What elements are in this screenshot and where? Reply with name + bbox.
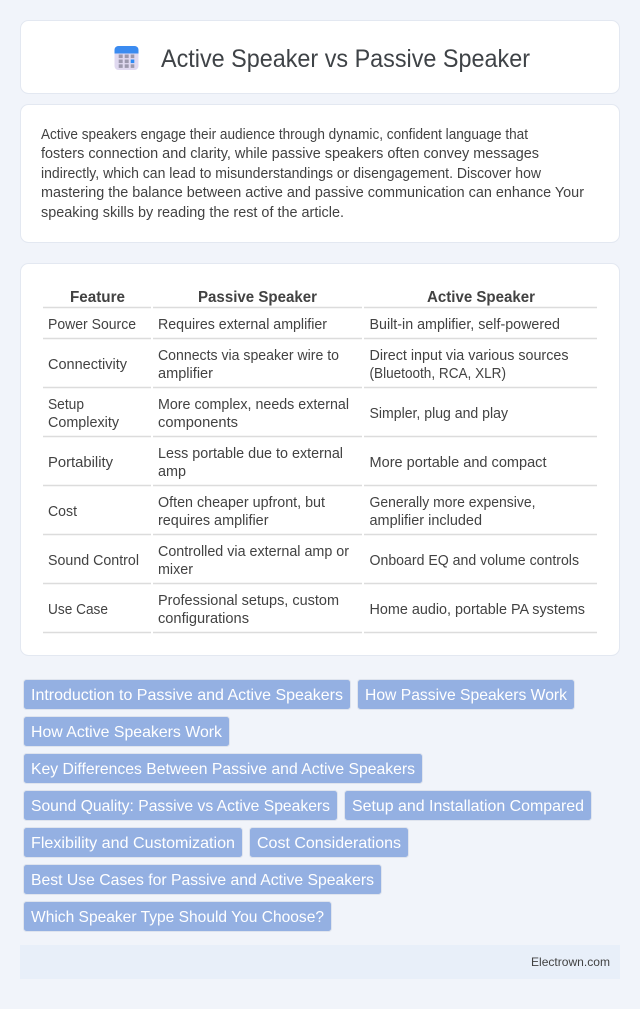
row: setup complexity: More complex, needs external (158, 397, 349, 413)
text block: introduction paragraph (41, 127, 584, 221)
row: use case (48, 593, 585, 627)
row: cost: requires amplifier (158, 513, 269, 529)
chip: cost considerations: Cost Considerations (257, 835, 401, 852)
row: portability: More portable and compact (370, 455, 547, 471)
row: connectivity: amplifier (158, 366, 213, 382)
row: setup complexity: Simpler, plug and play (370, 406, 509, 422)
row: setup complexity (48, 397, 509, 431)
row: power source: Requires external amplifier (158, 317, 327, 333)
row: portability (48, 446, 547, 480)
row: connectivity: Connectivity (48, 357, 128, 373)
chip: best use cases: Best Use Cases for Passive and Active Speakers (31, 872, 374, 889)
chip: how active speakers work (24, 716, 230, 746)
table header row: Active Speaker (427, 289, 535, 306)
table header row (70, 289, 535, 306)
table header row: Passive Speaker (198, 289, 317, 306)
row: use case: configurations (158, 611, 249, 627)
text block: introduction paragraph: indirectly, which can lead to misunderstandings or disengagement. Discover how (41, 166, 542, 182)
chip: key differences (24, 754, 422, 784)
footer: Electrown.com (531, 955, 610, 969)
row: power source: Power Source (48, 317, 136, 333)
row: use case: Professional setups, custom (158, 593, 339, 609)
panel: title header (20, 20, 620, 94)
row: sound control: mixer (158, 562, 193, 578)
row: setup complexity: Setup (48, 397, 84, 413)
chip: key differences: Key Differences Between Passive and Active Speakers (31, 761, 415, 778)
chip: best use cases (24, 864, 382, 894)
chip: how passive speakers work (358, 680, 574, 710)
row: connectivity: (Bluetooth, RCA, XLR) (370, 366, 506, 382)
chip: flexibility (24, 828, 242, 858)
chip: sound quality: Sound Quality: Passive vs Active Speakers (31, 798, 330, 815)
row: use case: Home audio, portable PA systems (370, 602, 585, 618)
panel: introduction (20, 104, 620, 242)
row: cost: Generally more expensive, (370, 495, 536, 511)
section link chips (24, 680, 592, 932)
chip: introduction (24, 680, 350, 710)
row: sound control: Onboard EQ and volume controls (370, 553, 579, 569)
row: setup complexity: Complexity (48, 415, 120, 431)
chip: cost considerations (250, 828, 408, 858)
chip: sound quality (24, 790, 338, 820)
text block: introduction paragraph: speaking skills by reading the rest of the article. (41, 205, 344, 221)
chip: which speaker type (24, 902, 332, 932)
chip: how passive speakers work: How Passive Speakers Work (365, 687, 568, 704)
chip: how active speakers work: How Active Speakers Work (31, 724, 223, 741)
chip: flexibility: Flexibility and Customization (31, 835, 235, 852)
chip: which speaker type: Which Speaker Type Should You Choose? (31, 909, 324, 926)
row: cost: Cost (48, 504, 77, 520)
chip: introduction: Introduction to Passive and Active Speakers (31, 687, 343, 704)
row: sound control: Sound Control (48, 553, 139, 569)
row: connectivity: Direct input via various sources (370, 348, 568, 364)
row: cost: amplifier included (370, 513, 482, 529)
row: sound control (48, 544, 579, 578)
row: portability: Less portable due to external (158, 446, 343, 462)
row: sound control: Controlled via external amp or (158, 544, 349, 560)
row: portability: Portability (48, 455, 114, 471)
text block: introduction paragraph: fosters connection and clarity, while passive speakers often convey messages (41, 146, 539, 162)
row: connectivity: Connects via speaker wire to (158, 348, 339, 364)
row: use case: Use Case (48, 602, 108, 618)
row: setup complexity: components (158, 415, 238, 431)
text block: introduction paragraph: Active speakers engage their audience through dynamic, confident language that (41, 127, 528, 143)
title: Active Speaker vs Passive Speaker (161, 45, 530, 73)
row: power source: Built-in amplifier, self-powered (370, 317, 560, 333)
row: portability: amp (158, 464, 186, 480)
chip: setup and installation: Setup and Installation Compared (352, 798, 584, 815)
icon: calendar grid (114, 46, 138, 70)
row: power source (48, 317, 560, 333)
text block: introduction paragraph: mastering the balance between active and passive communication can enhance Your (41, 185, 584, 201)
chip: setup and installation (344, 790, 592, 820)
footer (20, 945, 620, 979)
row: cost: Often cheaper upfront, but (158, 495, 325, 511)
row: cost (48, 495, 536, 529)
row: connectivity (48, 348, 568, 382)
table header row: Feature (70, 289, 125, 306)
panel: comparison table (20, 264, 620, 656)
